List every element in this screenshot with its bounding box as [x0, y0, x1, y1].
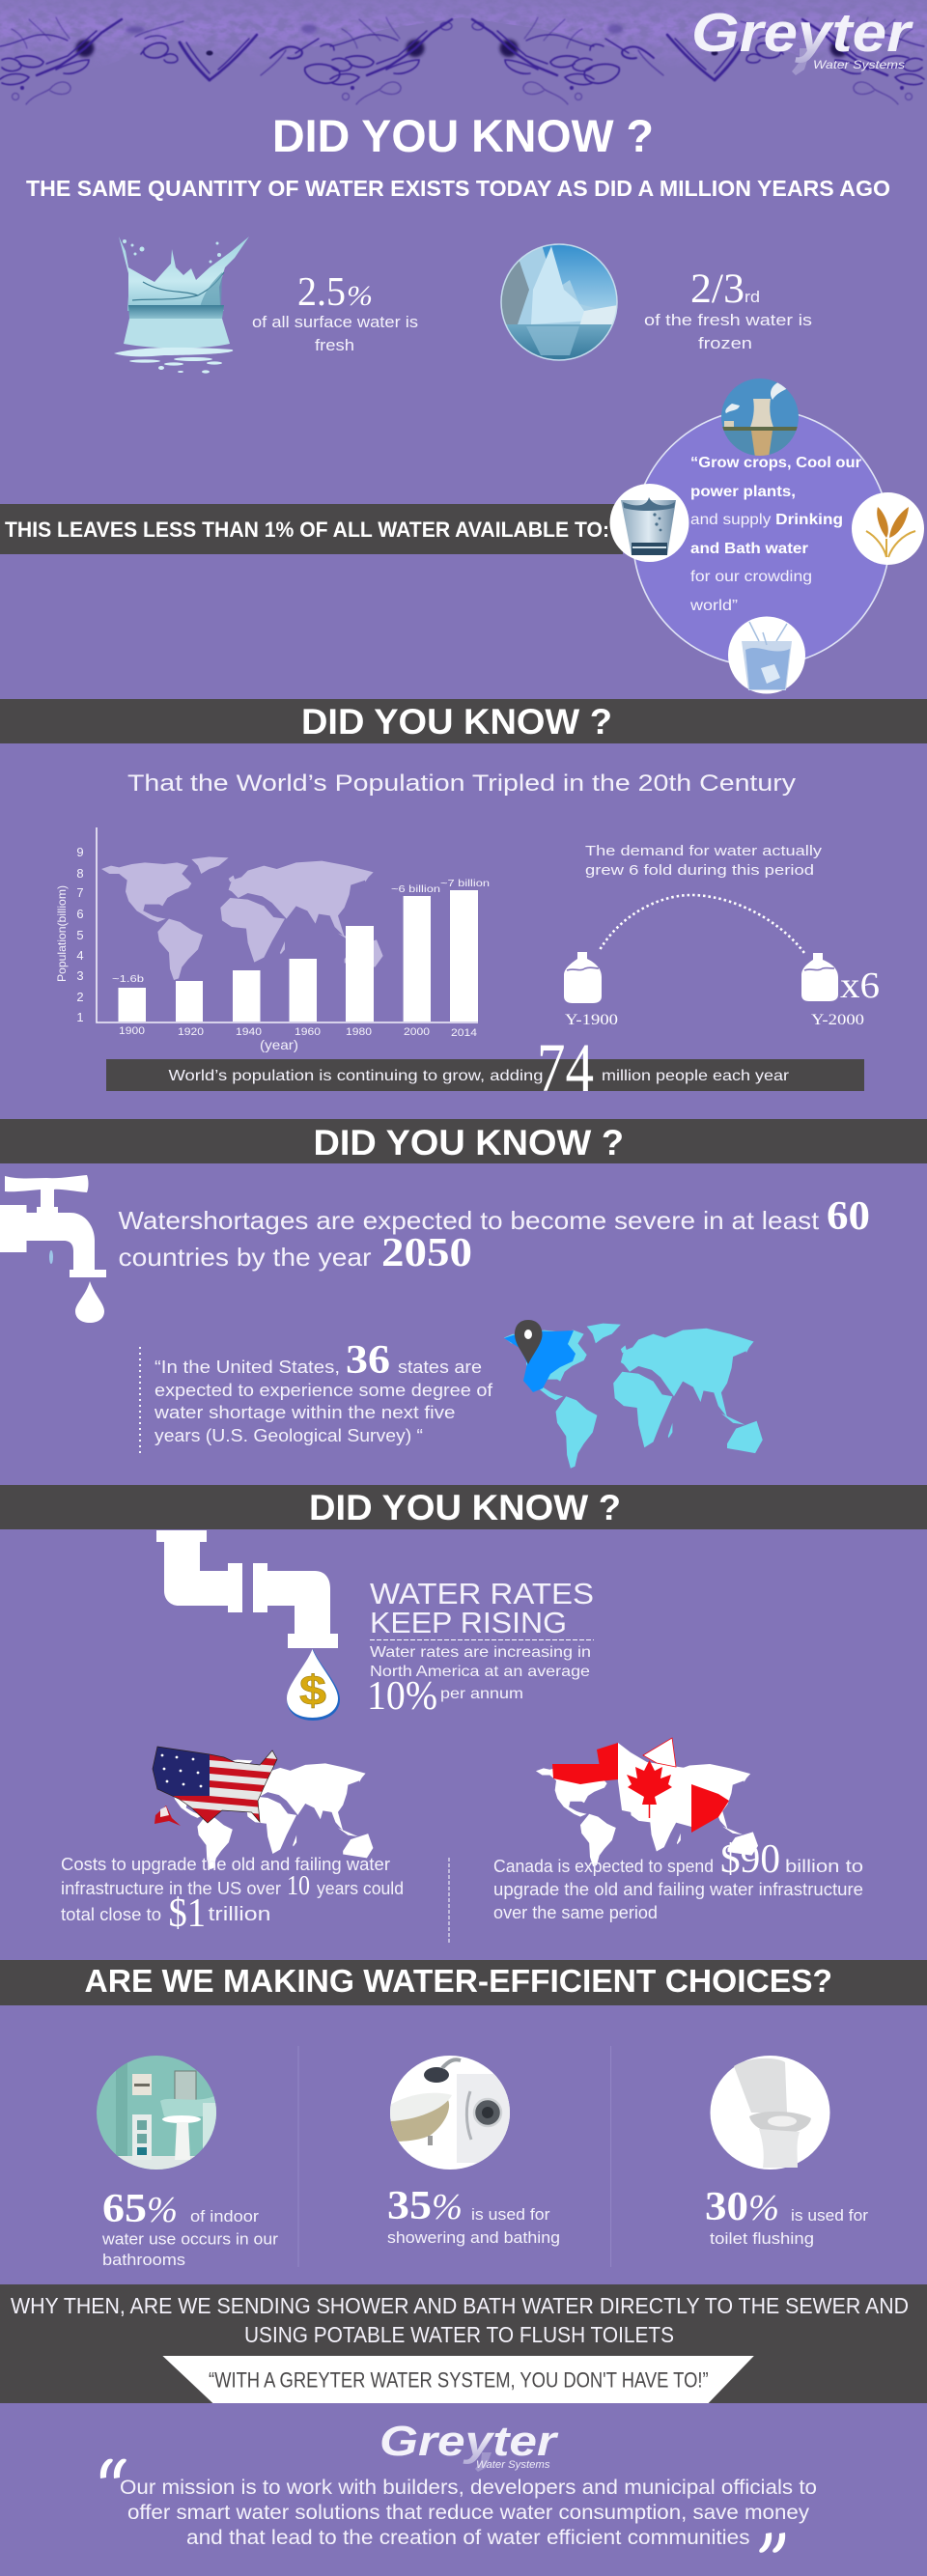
bar chart: population: 3 [76, 968, 84, 983]
logo: Greyter bottom: Water Systems [476, 2459, 550, 2471]
callout: population growth 74 million: 74 [537, 1029, 594, 1106]
icon: water splash [114, 237, 249, 374]
label: x6: x6 [840, 966, 880, 1006]
stat: 65% bathrooms: 65 [102, 2187, 147, 2231]
map: world with Canada flag [536, 1738, 758, 1866]
section bar: water-efficient choices [0, 1960, 927, 2005]
text: water shortages: 60 [827, 1194, 870, 1239]
banner: less than 1% [0, 504, 623, 554]
stat: 2/3rd frozen: 2/3 [690, 266, 744, 312]
callout: population growth 74 million: World’s population is continuing to grow, adding [168, 1068, 543, 1084]
text: mission statement: Our mission is to work with builders, developers and municipal officials to [120, 2477, 817, 2499]
subtitle: THE SAME QUANTITY OF WATER EXISTS TODAY AS DID A MILLION YEARS AGO [26, 176, 890, 201]
text: Canada upgrade costs: upgrade the old and failing water infrastructure [493, 1880, 863, 1899]
stat: 65% bathrooms: water use occurs in our [101, 2230, 278, 2248]
text: mission statement: and that lead to the creation of water efficient communities [186, 2527, 749, 2549]
icon: jug 1900 [564, 952, 602, 1003]
icon: opening quote mark [100, 2459, 126, 2478]
stat: 2/3rd frozen: frozen [698, 334, 752, 352]
bar chart: population: 1 [76, 1010, 84, 1024]
text: US upgrade costs: infrastructure in the US over [61, 1879, 281, 1898]
bar chart: population: (year) [260, 1037, 298, 1052]
bar chart: population: ~7 billion [440, 879, 490, 889]
text: US states quote: water shortage within the next five [154, 1403, 456, 1422]
text: US states quote: 36 [346, 1338, 390, 1383]
stat: 2.5% fresh water: of all surface water is [252, 313, 418, 331]
decorative header water pattern [0, 0, 927, 104]
section bar: did you know 4: DID YOU KNOW ? [309, 1488, 621, 1527]
stat: 65% bathrooms: % [147, 2190, 178, 2230]
section bar: did you know 2: DID YOU KNOW ? [301, 702, 612, 742]
panel: why then banner [0, 2284, 927, 2403]
bar chart: population: 6 [76, 907, 84, 921]
text: uses quote [689, 455, 861, 614]
icon: location pin [515, 1320, 543, 1364]
bar chart: population: 8 [76, 866, 84, 881]
text: US states quote: years (U.S. Geological Survey) “ [154, 1426, 423, 1445]
icon: glacier photo circle [499, 241, 620, 363]
logo: Greyter top right: Greyter [691, 2, 913, 64]
text: water rates keep rising: 10% [367, 1674, 437, 1719]
bar chart: population: 1940 [236, 1026, 262, 1038]
icon: jug 2000 [801, 953, 838, 1001]
bar chart: population: 1920 [178, 1026, 204, 1038]
stat: 35% showering: % [432, 2187, 463, 2227]
icon: glass of water [610, 484, 689, 562]
stat: 65% bathrooms: bathrooms [102, 2251, 185, 2269]
callout: with a Greyter water system: “WITH A GREYTER WATER SYSTEM, YOU DON'T HAVE TO!” [209, 2367, 709, 2393]
icon: bathroom photo [97, 2056, 216, 2171]
section bar: did you know 3: DID YOU KNOW ? [313, 1123, 624, 1162]
text: Canada upgrade costs: over the same period [493, 1903, 658, 1922]
callout: population growth 74 million: million people each year [602, 1068, 790, 1084]
section bar: water-efficient choices: ARE WE MAKING WATER-EFFICIENT CHOICES? [85, 1963, 832, 1999]
stat: 2/3rd frozen: rd [744, 288, 760, 306]
text: uses quote: and supply Drinking [690, 512, 843, 528]
text: demand for water [585, 843, 823, 879]
text: uses quote: “Grow crops, Cool our [690, 455, 861, 471]
banner: less than 1%: THIS LEAVES LESS THAN 1% OF ALL WATER AVAILABLE TO: [5, 518, 609, 542]
bar chart: population: 2014 [451, 1027, 477, 1039]
text: mission statement: offer smart water solutions that reduce water consumption, save money [127, 2502, 810, 2524]
section bar: did you know 3 [0, 1119, 927, 1163]
bar chart: population: 4 [76, 948, 84, 963]
text: water rates keep rising: KEEP RISING [370, 1606, 567, 1639]
map: world with US highlighted [504, 1320, 763, 1469]
stat: 35% showering: is used for [471, 2205, 550, 2224]
stat: 2/3rd frozen: of the fresh water is [644, 311, 812, 329]
bar chart: population: 1980 [346, 1026, 372, 1038]
callout: population growth 74 million [106, 1029, 864, 1106]
stat: 30% toilet flushing: toilet flushing [710, 2229, 814, 2248]
stat: 2.5% fresh water [252, 270, 418, 354]
logo: Greyter top right: Water Systems [813, 58, 905, 71]
label: Y-1900: Y-1900 [565, 1012, 618, 1028]
bar chart: population: 9 [76, 845, 84, 859]
text: US upgrade costs: trillion [209, 1904, 270, 1925]
text: water rates keep rising [367, 1577, 594, 1719]
panel: why then banner: USING POTABLE WATER TO FLUSH TOILETS [244, 2322, 674, 2347]
text: Canada upgrade costs: Canada is expected to spend [493, 1857, 714, 1876]
stat: 35% showering: showering and bathing [387, 2228, 560, 2247]
text: demand for water: grew 6 fold during this period [585, 862, 814, 879]
bar chart: population: ~1.6b [112, 974, 145, 985]
bar chart: population: 5 [76, 928, 84, 942]
icon: broken pipe with dollar drop: $ [299, 1667, 326, 1715]
bar chart: population: 1900 [119, 1025, 145, 1037]
divider: dotted [139, 1347, 141, 1456]
stat: 30% toilet flushing: 30 [705, 2185, 748, 2229]
bar chart: population: 7 [76, 885, 84, 900]
icon: toilet photo [711, 2056, 830, 2170]
text: US upgrade costs: Costs to upgrade the old and failing water [61, 1855, 390, 1874]
stat: 35% showering: 35 [387, 2184, 432, 2228]
stat: 30% toilet flushing: % [748, 2188, 779, 2228]
section bar: did you know 2 [0, 699, 927, 743]
text: uses quote: power plants, [690, 484, 796, 500]
icon: broken pipe with dollar drop [156, 1530, 340, 1721]
text: water rates keep rising: North America at an average [370, 1664, 590, 1680]
logo: Greyter bottom: Gre yter [379, 2418, 559, 2465]
bar chart: population: 2000 [404, 1026, 430, 1038]
text: Canada upgrade costs [493, 1837, 863, 1922]
text: water rates keep rising: WATER RATES [370, 1577, 594, 1610]
text: water rates keep rising: per annum [440, 1686, 523, 1702]
text: US states quote: expected to experience some degree of [154, 1381, 493, 1400]
label: Y-2000: Y-2000 [811, 1012, 864, 1028]
icon: glass with ice [728, 616, 805, 693]
stat: 65% bathrooms: of indoor [190, 2207, 259, 2226]
bar chart: population: 2 [76, 990, 84, 1004]
text: water shortages: countries by the year [118, 1243, 372, 1272]
text: mission statement [120, 2477, 817, 2549]
stat: 35% showering [387, 2184, 560, 2247]
text: water shortages: Watershortages are expected to become severe in at least [118, 1206, 820, 1235]
title: DID YOU KNOW ? [272, 110, 654, 161]
text: uses quote: for our crowding [690, 569, 812, 585]
text: uses quote: and Bath water [690, 541, 808, 557]
text: demand for water: The demand for water actually [585, 843, 823, 859]
bar chart: population [55, 827, 490, 1052]
stat: 2/3rd frozen [644, 266, 812, 352]
stat: 2.5% fresh water: % [347, 280, 373, 312]
arrow: dotted arc between jugs [601, 895, 804, 953]
chart background map [101, 856, 383, 980]
text: US upgrade costs: total close to [61, 1905, 161, 1924]
divider: dashed [448, 1858, 450, 1943]
bar chart: population: ~6 billion [391, 884, 440, 895]
text: US upgrade costs: 10 [287, 1871, 310, 1901]
stat: 30% toilet flushing [705, 2185, 868, 2248]
heading: population tripled: That the World’s Population Tripled in the 20th Century [127, 770, 796, 797]
stat: 2.5% fresh water: 2.5 [297, 270, 346, 315]
stat: 65% bathrooms [101, 2187, 278, 2269]
icon: wheat [852, 492, 924, 565]
text: US states quote: states are [398, 1358, 482, 1377]
bar chart: population: Population(billiom) [55, 885, 69, 982]
panel: uses of water circle [610, 377, 924, 693]
icon: dripping tap [0, 1175, 106, 1323]
text: US states quote: “In the United States, [154, 1358, 340, 1377]
bar chart: population: 1960 [295, 1026, 321, 1038]
text: US upgrade costs: $1 [168, 1891, 206, 1936]
text: US upgrade costs: years could [317, 1879, 404, 1898]
text: water shortages: 2050 [381, 1231, 472, 1275]
map: world with US flag [141, 1743, 373, 1869]
section bar: did you know 4 [0, 1485, 927, 1529]
icon: bath and washer photo [390, 2056, 511, 2170]
icon: power plant [721, 378, 799, 456]
stat: 2.5% fresh water: fresh [315, 336, 354, 354]
stat: 30% toilet flushing: is used for [791, 2206, 868, 2225]
text: Canada upgrade costs: $90 [720, 1837, 780, 1882]
text: water shortages [118, 1194, 870, 1275]
callout: with a Greyter water system [162, 2356, 754, 2403]
text: US states quote [154, 1338, 493, 1445]
text: water rates keep rising: Water rates are increasing in [370, 1644, 591, 1661]
icon: closing quote mark [759, 2533, 785, 2553]
text: US upgrade costs [61, 1855, 404, 1936]
text: uses quote: world” [689, 598, 738, 614]
text: Canada upgrade costs: billion to [785, 1857, 863, 1876]
